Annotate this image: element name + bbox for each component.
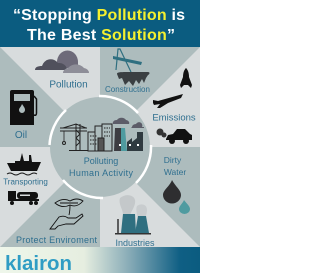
icon: fuel pump xyxy=(10,90,36,125)
icon: pollution clouds xyxy=(35,50,89,73)
label: Emissions: Emissions xyxy=(152,112,196,124)
title banner: “Stopping Pollution is xyxy=(13,7,185,24)
label: Dirty Water xyxy=(164,155,186,177)
label: Protect Enviroment: Protect Enviroment xyxy=(16,235,97,245)
label: Transporting: Transporting xyxy=(3,178,48,186)
icon: ship xyxy=(7,153,41,175)
icon: water drop xyxy=(179,200,190,214)
label: Polluting Human Activity: Human Activity xyxy=(69,168,134,178)
title banner: The Best Solution” xyxy=(27,27,175,44)
icon: rocket xyxy=(180,68,192,88)
footer band xyxy=(0,247,200,273)
icon: cooling towers xyxy=(115,195,151,234)
label: Polluting Human Activity xyxy=(69,156,134,178)
label: Dirty Water: Water xyxy=(164,167,186,177)
icon: factory with smoke xyxy=(113,118,144,151)
icon: car with exhaust xyxy=(156,128,192,144)
icon: oil drop xyxy=(163,180,181,204)
label: Construction: Construction xyxy=(105,85,150,94)
label: Industries: Industries xyxy=(115,238,155,248)
icon: tanker truck xyxy=(8,191,39,205)
label: Pollution: Pollution xyxy=(49,80,88,90)
icon: hand holding leaves xyxy=(50,199,83,229)
icon: city buildings xyxy=(88,124,112,151)
icon: crane xyxy=(60,124,88,150)
label: Dirty Water: Dirty xyxy=(164,155,182,165)
label: Polluting Human Activity: Polluting xyxy=(84,156,118,166)
icon: oil pump xyxy=(113,49,150,86)
title banner xyxy=(0,0,200,47)
central circle xyxy=(50,96,151,198)
icon: airplane xyxy=(153,94,183,108)
panel: sector background xyxy=(0,46,200,247)
label: Oil: Oil xyxy=(15,130,27,141)
